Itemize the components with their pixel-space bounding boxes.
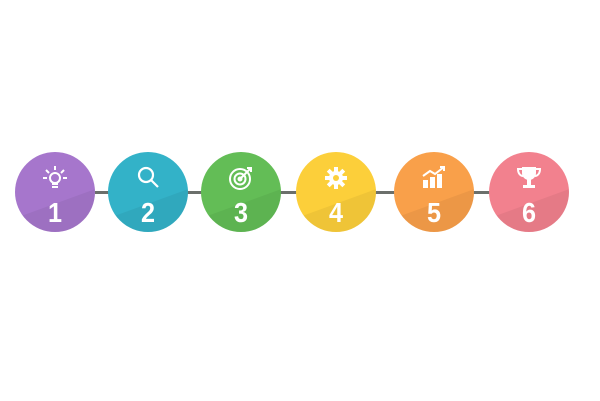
step 5 circle: [394, 152, 474, 232]
icon: growth chart: [422, 166, 445, 188]
icon: magnifier: [138, 166, 159, 188]
icon: gear: [325, 167, 347, 189]
step 1 circle: [15, 152, 95, 232]
step 1 circle: 1: [48, 197, 62, 228]
step 3 circle: [201, 152, 281, 232]
step 6 circle: 6: [522, 197, 536, 228]
step 3 circle: 3: [234, 197, 248, 228]
icon: trophy: [517, 167, 541, 188]
step 5 circle: 5: [427, 197, 441, 228]
step 2 circle: [108, 152, 188, 232]
icon: target: [229, 167, 252, 190]
step 2 circle: 2: [141, 197, 155, 228]
connector line: [95, 191, 491, 194]
icon: lightbulb: [43, 166, 67, 188]
step 4 circle: 4: [329, 197, 343, 228]
step 4 circle: [296, 152, 376, 232]
step 6 circle: [489, 152, 569, 232]
